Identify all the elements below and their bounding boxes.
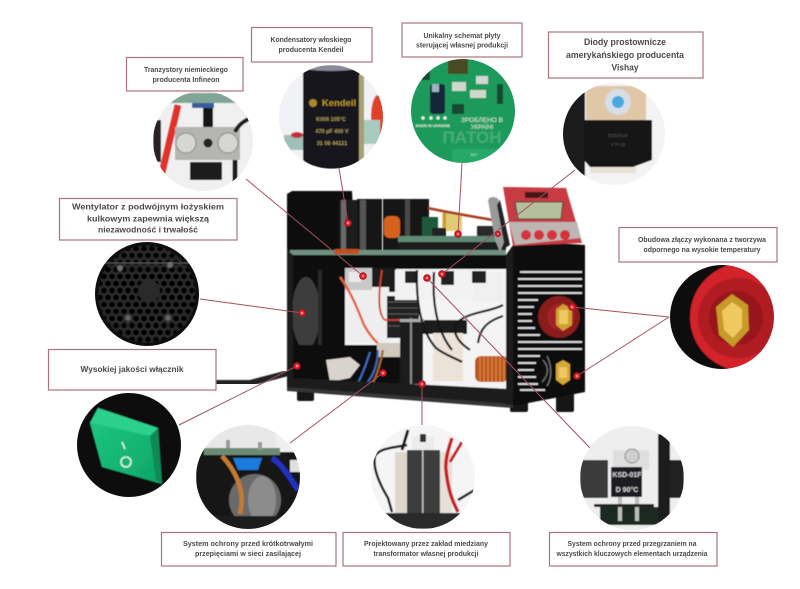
heatsinks — [343, 287, 389, 343]
photo: rectifier diode — [562, 82, 666, 186]
display — [515, 202, 563, 219]
label: connector housing: odpornego na wysokie temperatury — [644, 245, 761, 254]
white winding — [433, 333, 463, 381]
label: transistors: Tranzystory niemieckiego — [144, 65, 228, 74]
control panel — [503, 187, 582, 246]
black socket — [539, 352, 579, 392]
red wires — [340, 277, 403, 362]
label: fan: niezawodność i trwałość — [98, 224, 198, 234]
bottom frame — [287, 250, 513, 406]
left fan panel — [287, 191, 355, 255]
dark rear section — [423, 320, 467, 334]
photo: capacitor: 470 µF 400 V — [315, 129, 349, 135]
label: surge protection: przepięciami w sieci zasilającej — [195, 549, 301, 558]
copper coil — [475, 356, 508, 382]
label: transformer: Projektowany przez zakład miedziany — [364, 539, 489, 548]
label: control board: Unikalny schemat płyty — [424, 31, 501, 40]
label: transistors: producenta Infineon — [152, 75, 220, 84]
machine feet — [297, 386, 574, 412]
photo: thermal switch: D 90°C — [616, 486, 638, 494]
steel shelf — [293, 255, 507, 269]
ventilation slots — [518, 272, 582, 390]
photo: control board: УКРАЇНІ — [471, 124, 494, 131]
label: fan: Wentylator z podwójnym łożyskiem — [72, 202, 224, 212]
photo: control board: ЗРОБЛЕНО В — [461, 117, 503, 124]
photo: capacitor: K006 105°C — [316, 117, 346, 123]
right housing — [513, 240, 585, 406]
photo: surge protection — [196, 424, 303, 530]
photo: fan grille — [94, 241, 200, 347]
right vertical post — [506, 245, 517, 406]
label: fan: kulkowym zapewnia większą — [87, 214, 209, 224]
label: switch — [48, 350, 216, 390]
photo: control board: ПАТОН — [442, 128, 502, 147]
label: capacitors: Kondensatory włoskiego — [270, 35, 352, 44]
label: diodes: amerykańskiego producenta — [566, 49, 685, 60]
fan — [293, 268, 345, 360]
label: transformer — [343, 532, 510, 566]
bottom compartment — [293, 345, 403, 385]
brand on capacitor: Kendeil — [322, 98, 356, 109]
label: diodes: Vishay — [612, 62, 639, 72]
welding machine — [287, 187, 585, 412]
label: capacitors — [252, 28, 372, 62]
photo: control board — [410, 58, 516, 165]
label: overheat protection — [550, 532, 717, 566]
hotspot markers — [293, 219, 581, 388]
label: connector housing: Obudowa złączy wykonana z tworzywa — [638, 235, 767, 244]
photo: control board: R17 — [471, 153, 477, 157]
label: overheat protection: wszystkich kluczowych elementach urządzenia — [556, 549, 708, 558]
label: capacitors: producenta Kendeil — [278, 45, 344, 54]
label: connector housing — [619, 228, 777, 262]
dark section behind heatsink — [372, 268, 396, 292]
photo: copper transformer — [371, 424, 478, 530]
photo: green switch — [76, 392, 183, 499]
label: transformer: transformator własnej produkcji — [374, 549, 478, 558]
printed board text: MADE IN UKRAINE — [416, 124, 451, 128]
clamp on side — [488, 197, 505, 252]
label: diodes — [548, 32, 703, 78]
upper components — [384, 216, 400, 238]
buttons — [521, 230, 570, 240]
label: control board: sterującej własnej produkcji — [416, 40, 508, 50]
switch marks — [122, 442, 125, 449]
photo: rectifier diode: D2E60U4 — [608, 133, 628, 138]
label: surge protection — [162, 532, 336, 566]
power cable — [216, 372, 292, 383]
leader lines — [179, 163, 669, 448]
sensor label: KSD-01F — [612, 472, 642, 479]
inner background — [293, 262, 508, 390]
label: control board — [402, 23, 522, 57]
photo: thermal switch — [578, 426, 686, 532]
photo: capacitor — [278, 64, 385, 170]
label: transistors — [126, 58, 243, 91]
photo: transistors — [150, 90, 256, 192]
red socket — [538, 296, 580, 338]
label: diodes: Diody prostownicze — [584, 36, 666, 47]
photo: rectifier diode: V PI J2 — [611, 142, 626, 147]
photo: capacitor: 31 08 44121 — [317, 141, 347, 147]
label: surge protection: System ochrony przed krótkotrwałymi — [183, 539, 313, 548]
brand plate — [525, 192, 548, 198]
central transformer core — [400, 322, 423, 384]
label: fan — [60, 198, 237, 240]
label: switch: Wysokiej jakości włącznik — [80, 365, 184, 374]
label: overheat protection: System ochrony przed przegrzaniem na — [568, 539, 697, 548]
top capacitors — [339, 199, 429, 252]
photo: red connector — [670, 265, 774, 369]
